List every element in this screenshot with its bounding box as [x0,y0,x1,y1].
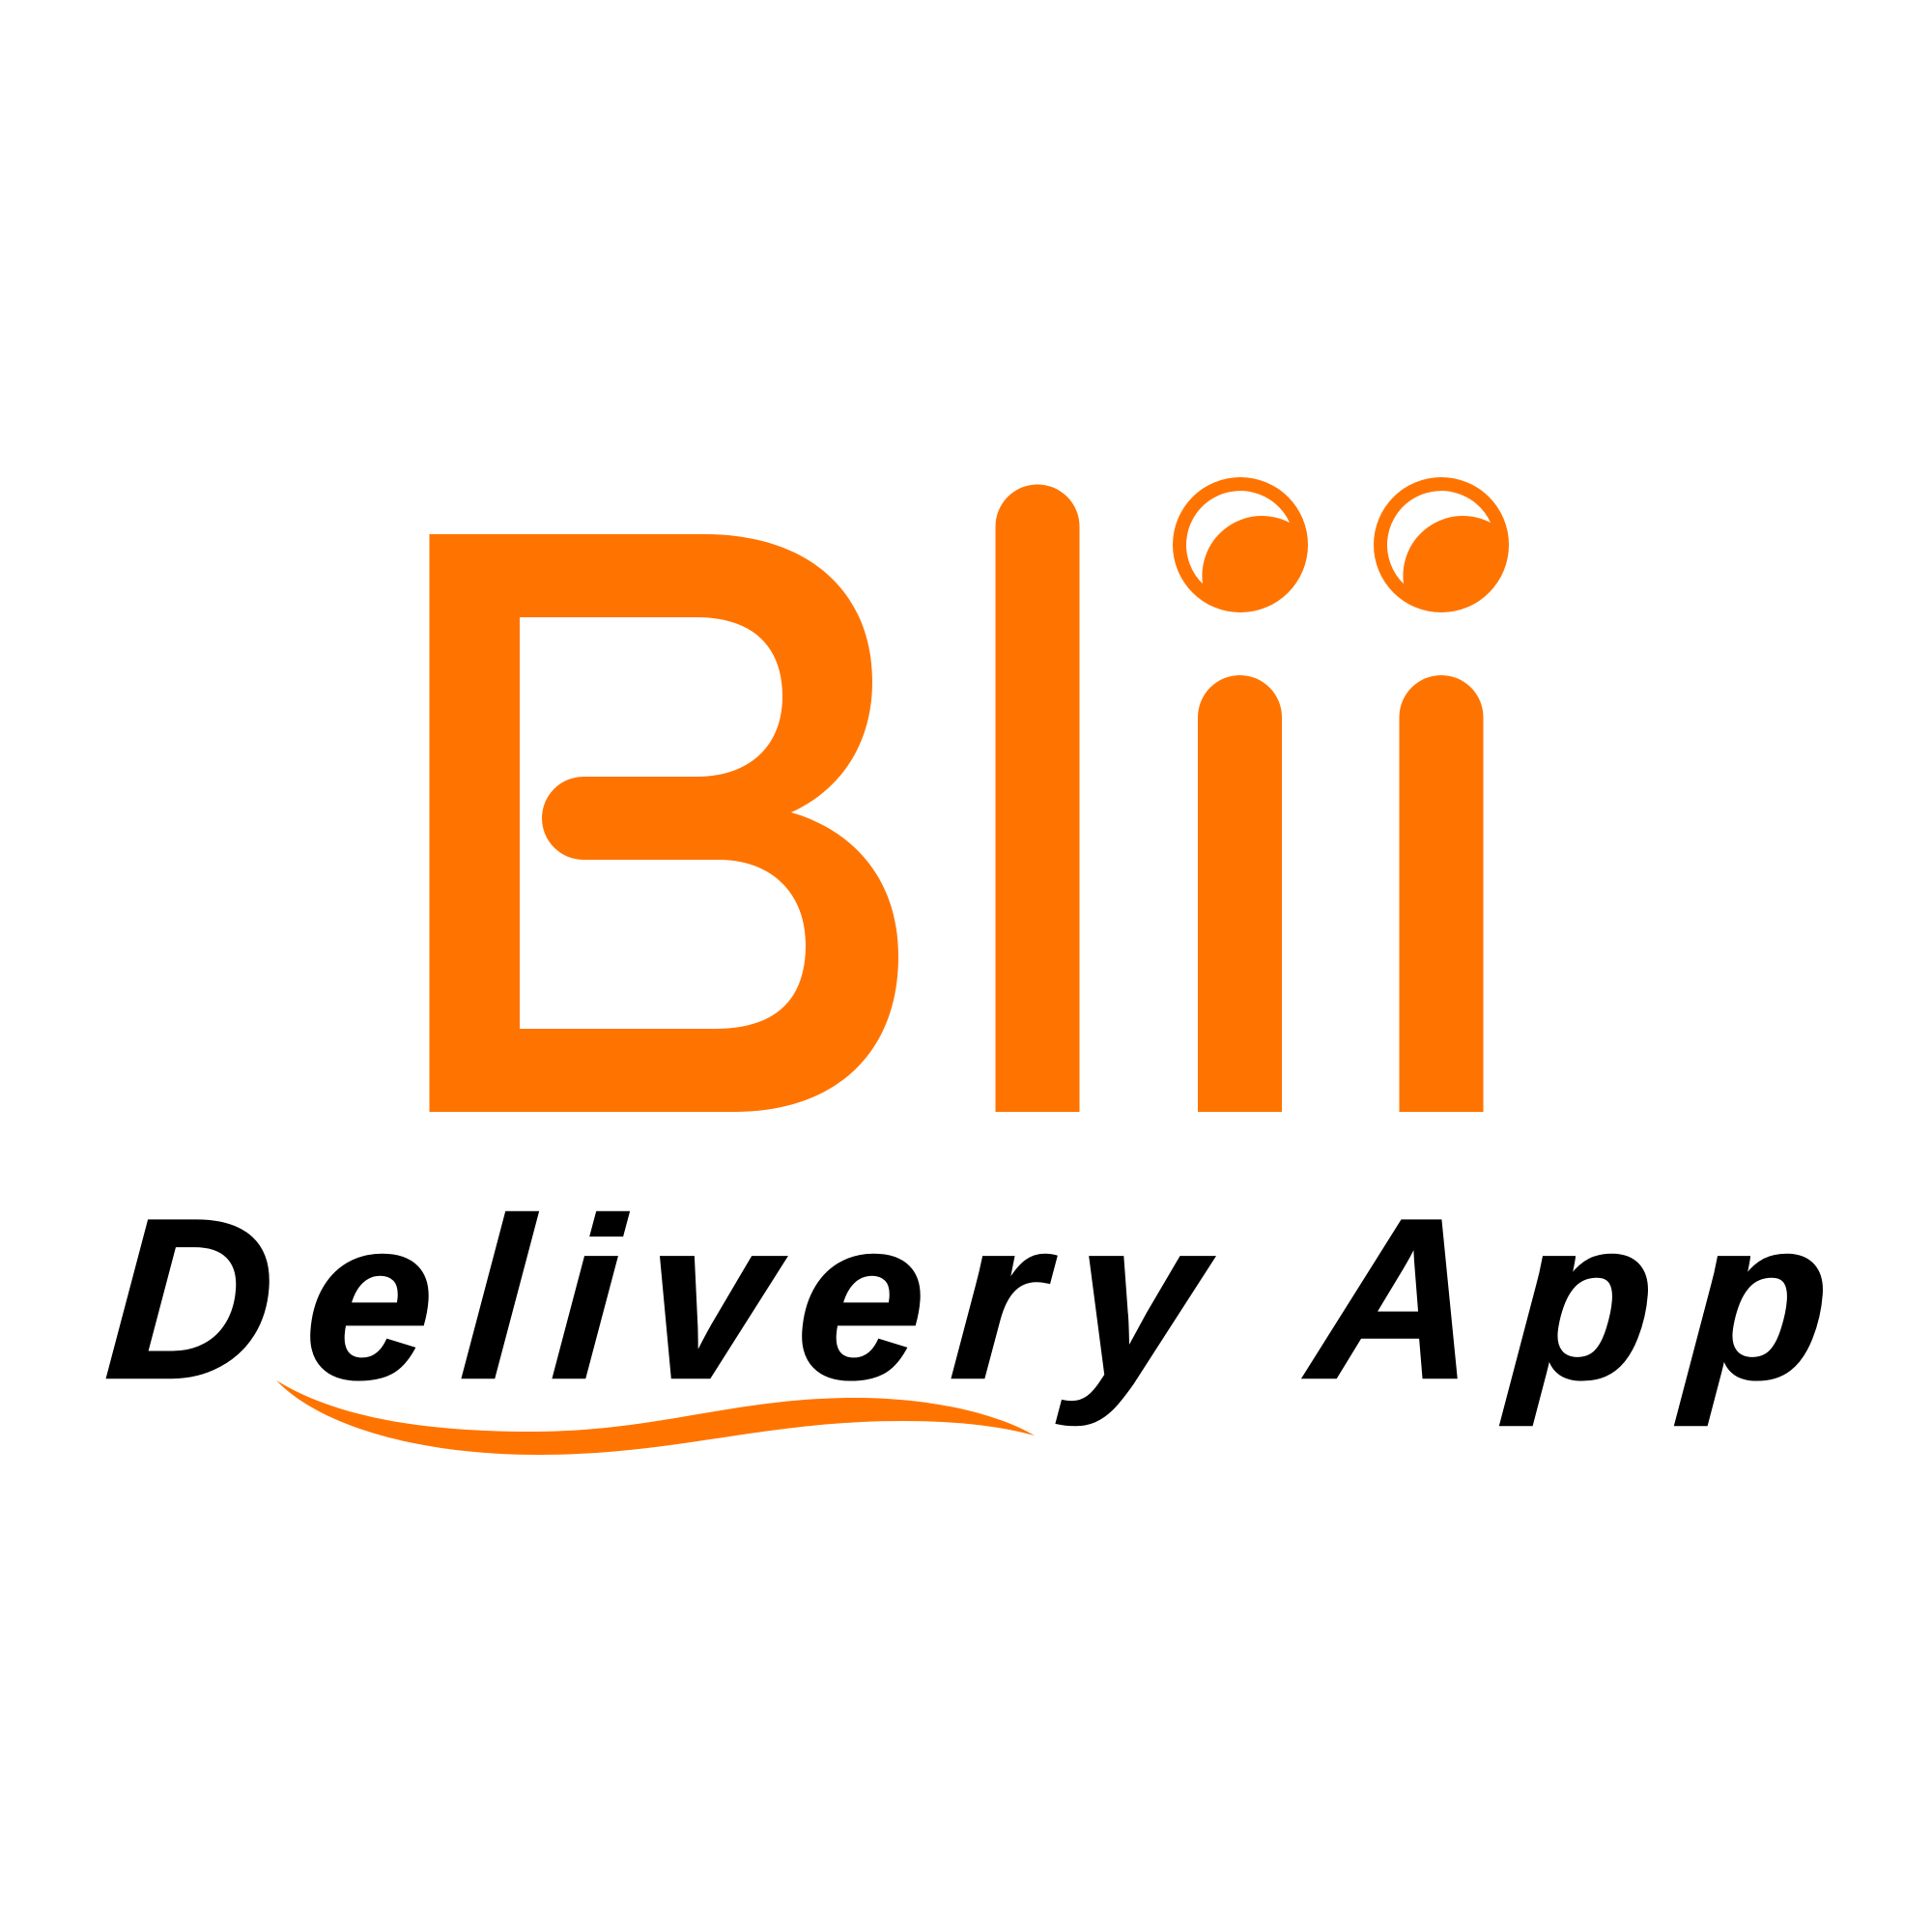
icon: second i dot, ring with crescent [1374,477,1509,612]
letter l [995,484,1080,1112]
icon: first i dot, ring with crescent [1173,477,1308,612]
tagline: Delivery App: Delivery App [99,1172,1837,1427]
logo: Blii wordmark [429,477,1509,1112]
letter i stem: second [1399,675,1484,1112]
decorative orange swoosh [276,1380,1035,1455]
letter B [429,534,898,1112]
letter i stem: first [1198,675,1282,1112]
